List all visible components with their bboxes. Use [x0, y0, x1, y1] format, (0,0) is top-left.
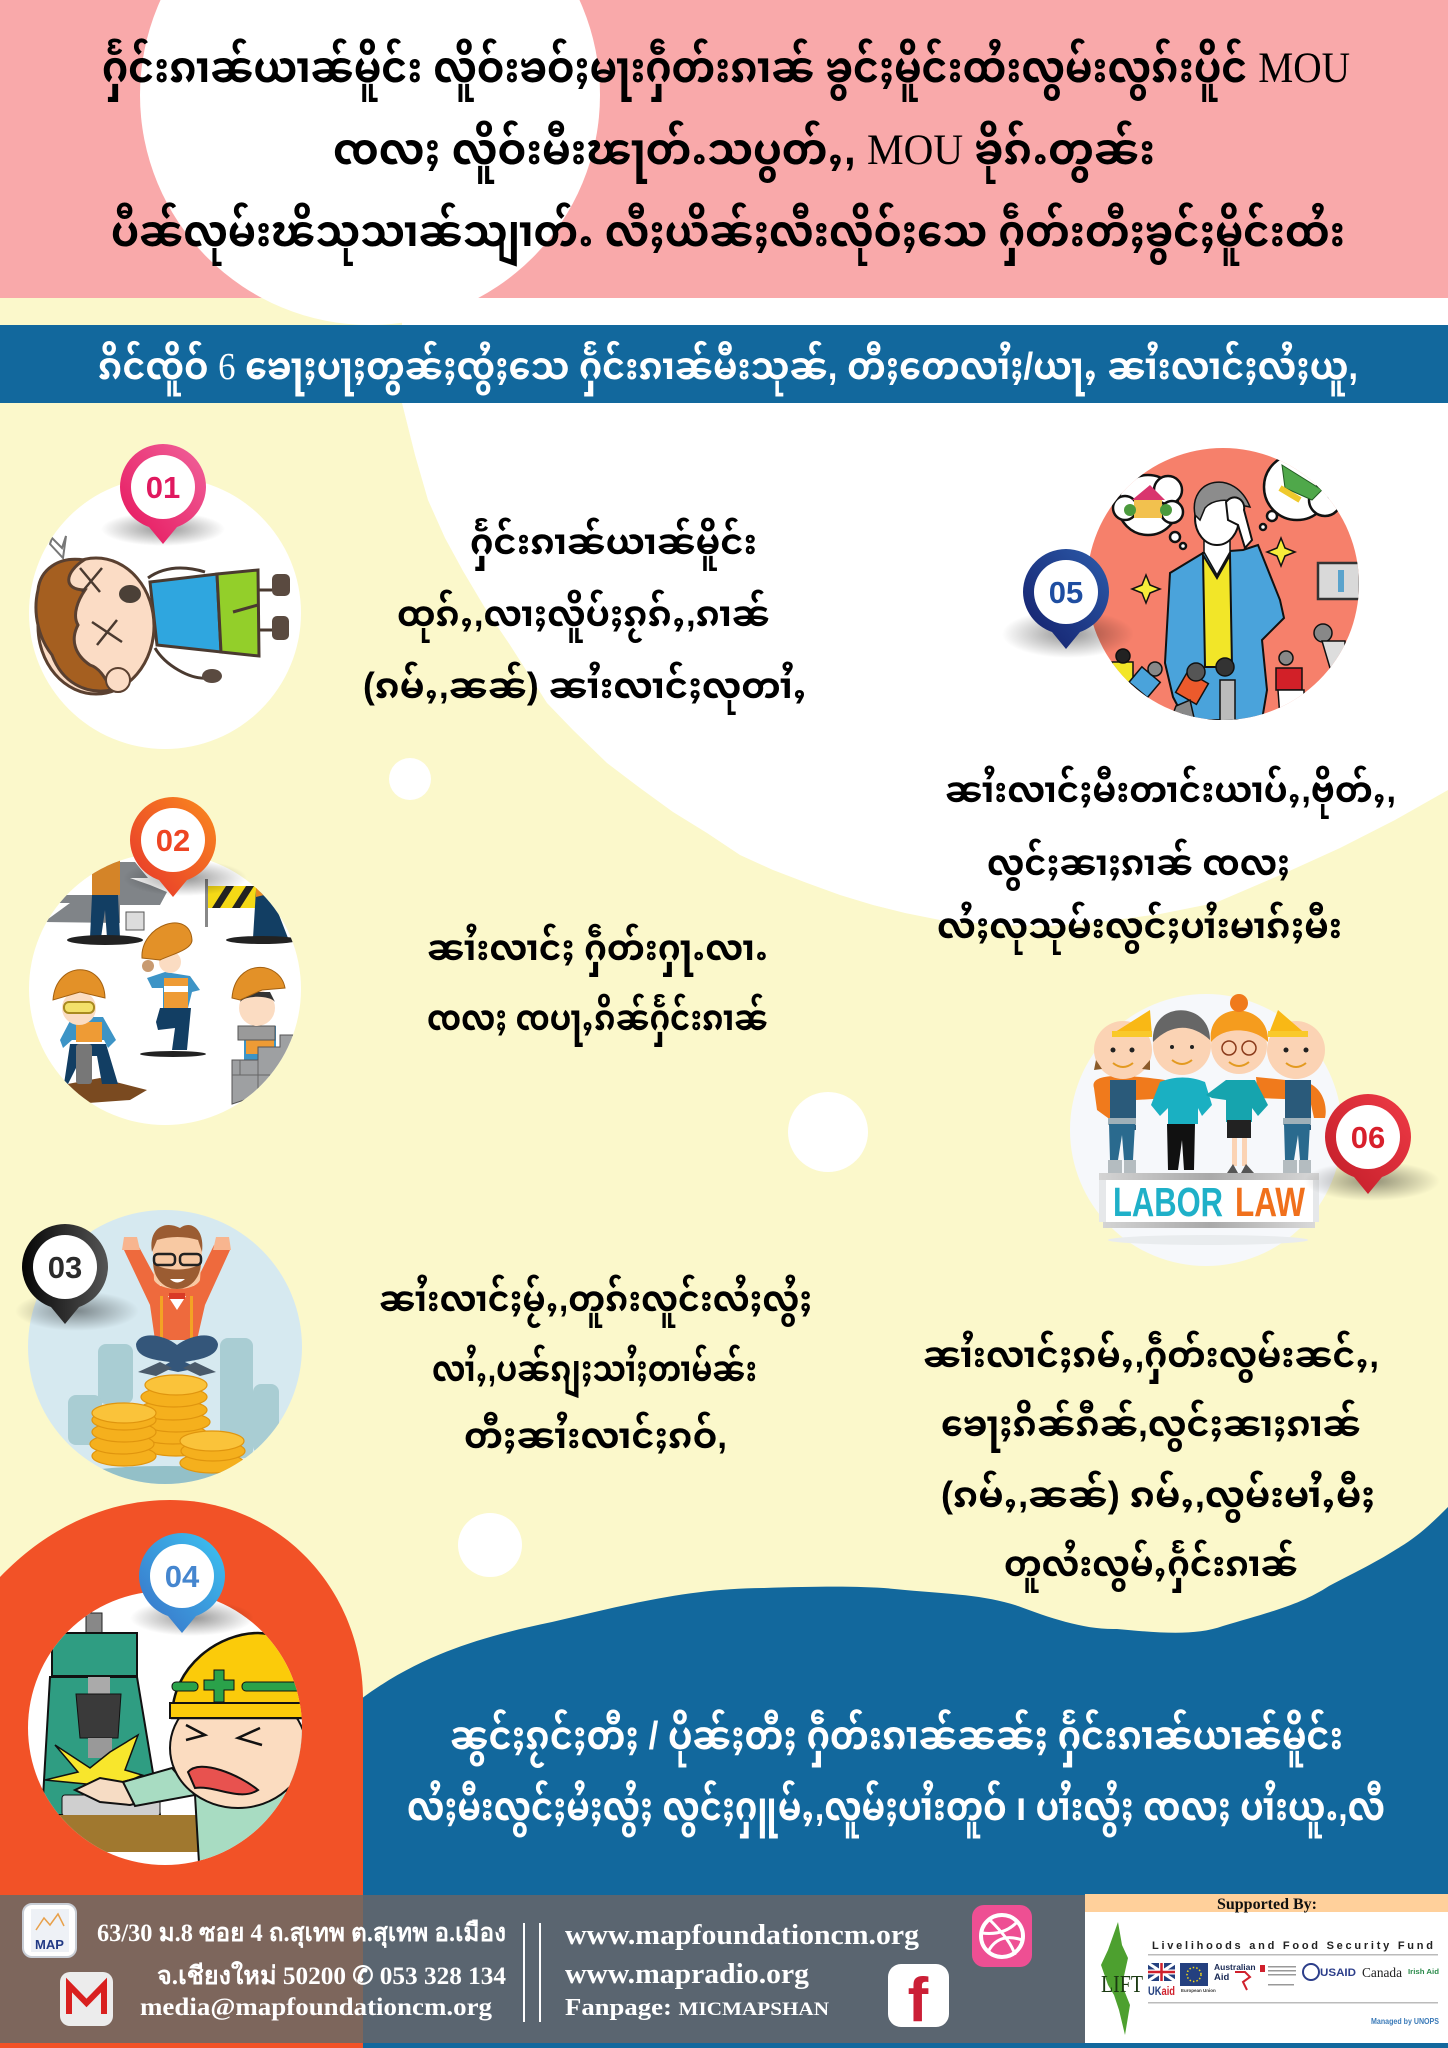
title: [102, 38, 1350, 267]
icon: MAP logo: [23, 1904, 76, 1957]
logo: UKaid: [1148, 1963, 1175, 1998]
background: blue wave: [361, 1507, 1448, 1900]
blue subtitle band: ၵိင်ၸိူဝ် 6 ၶေႃႈပႃႈတွၼ်ႈၸွႆႈသေ ႁႅင်းၵၢၼ်မီးသုၼ်, တီႈတေလၢႆႈ/ယႃႇ ၼၢႆးလၢင်ႈလႆႈယူ,: [98, 340, 1358, 397]
pin 02: 02: [156, 823, 190, 858]
text block 06: [923, 1330, 1379, 1593]
text block 03: တီႈၼၢႆးလၢင်ႈၵဝ်,: [464, 1411, 727, 1456]
worker centre: [140, 1051, 206, 1057]
text block 01: (ၵမ်ႇ,ၼၼ်) ၼၢႆးလၢင်ႈလုတၢႆႇ: [363, 661, 807, 715]
text block 01: ထုၵ်ႇ,လၢႈလိူပ်ႈၵႂၵ်ႇ,ၵၢၼ်: [397, 589, 770, 643]
worker right: [244, 1026, 276, 1060]
divider: [523, 1923, 541, 2022]
illustration 01: [36, 536, 290, 694]
closing statement: [407, 1709, 1385, 1838]
decorative dot: [458, 1513, 522, 1577]
panel 01: injured worker: [29, 477, 301, 749]
websites: [565, 1920, 919, 2021]
pin 06: [1304, 1094, 1440, 1201]
title: ၸလႈ လိူဝ်းမီးၽႃတ်ႉသပွတ်ႇ, MOU ၶိုၵ်ႉတွၼ်း: [333, 120, 1155, 184]
text block 06: ၶေႃႈၵိၼ်ၵီၼ်,လွင်ႈၼၢႈၵၢၼ်: [941, 1399, 1361, 1453]
text block 05: [937, 765, 1396, 955]
text block 06: ၼၢႆးလၢင်ႈၵမ်ႇ,ႁဵတ်းလွမ်းၼင်ႇ,: [923, 1330, 1379, 1384]
pin 04: 04: [165, 1559, 200, 1594]
pin 05: 05: [1049, 575, 1083, 610]
panel 05: press and stress: [1087, 448, 1360, 722]
pin 03: 03: [48, 1250, 82, 1285]
logo: LIFT: LIFT: [1101, 1972, 1143, 1998]
illustration 06: LABOR: [1113, 1179, 1223, 1225]
logo: Swiss: [1260, 1965, 1296, 1986]
websites: www.mapfoundationcm.org: [565, 1920, 919, 1951]
logo: UKaid: UKaid: [1148, 1984, 1175, 1998]
text block 02: ၼၢႆးလၢင်ႈ ႁဵတ်းႁႃႉလၢႉ: [427, 923, 768, 977]
text block 03: လၢႆႇ,ပၼ်ၵျႈသၢႆႈတၢမ်ၼ်း: [432, 1344, 757, 1399]
text block 05: လႆႈလုသုမ်းလွင်ႈပၢႆးမၢၵ်ႈမီး: [937, 901, 1342, 955]
icon: dribbble: [972, 1905, 1032, 1967]
decorative dot: [788, 1092, 868, 1172]
panel 02: unsafe work: [29, 853, 301, 1125]
logo: UNOPS: Managed by UNOPS: [1371, 2017, 1440, 2026]
logo: USAID: USAID: [1320, 1967, 1356, 1979]
text block 05: လွင်ႈၼၢႈၵၢၼ် ၸလႈ: [987, 838, 1290, 891]
icon: mail: [60, 1972, 113, 2026]
panel 04: machine accident: [28, 1592, 302, 1865]
text block 01: [363, 517, 807, 715]
pin 01: 01: [146, 470, 180, 505]
illustration 03: [68, 1225, 279, 1484]
websites: Fanpage: MICMAPSHAN: [565, 1995, 829, 2021]
logo: Australian Aid: Aid: [1214, 1972, 1230, 1983]
text block 05: ၼၢႆးလၢင်ႈမီးတၢင်းယၢပ်ႇ,ဗိုတ်ႇ,: [945, 765, 1396, 819]
text block 06: တူလႆးလွမ်ႇႁႅင်းၵၢၼ်: [1004, 1539, 1298, 1593]
blue subtitle band: [0, 325, 1448, 403]
background: orange arch: [0, 1500, 363, 1900]
panel 06: labor law: [1070, 994, 1342, 1266]
logo: Australian Aid: [1214, 1962, 1256, 1990]
title: ႁႅင်းၵၢၼ်ယၢၼ်မိူင်း လိူဝ်းၶဝ်ႈမႃးႁဵတ်းၵၢၼ် ၶွင်ႈမိူင်းထႆးလွမ်းလွၵ်းပိူင် MOU: [102, 38, 1350, 102]
pin 05: [1002, 549, 1134, 658]
illustration 02: [44, 855, 298, 1104]
logo: USAID: [1303, 1964, 1356, 1980]
websites: www.mapradio.org: [565, 1959, 809, 1990]
logo: LIFT: [1101, 1922, 1143, 2035]
logo: Irish Aid: Irish Aid: [1408, 1969, 1439, 1976]
contact address: [97, 1919, 506, 2021]
pin 02: [123, 797, 247, 897]
background: pink header: [0, 0, 1448, 298]
worker left: [62, 1078, 147, 1103]
decorative dot: [389, 758, 431, 800]
text block 03: ၼၢႆးလၢင်ႈမႂ်ႇ,တူၵ်းလူင်းလႆႈလွႆႈ: [379, 1274, 812, 1328]
logo: EU: European Union: [1181, 1988, 1216, 1993]
pin 06: 06: [1351, 1120, 1385, 1155]
text block 03: [379, 1274, 812, 1456]
icon: facebook: f: [908, 1966, 929, 2035]
pin 01: [101, 444, 225, 546]
background: cream page: [0, 298, 1448, 1898]
pin 03: [15, 1224, 139, 1331]
text block 06: (ၵမ်ႇ,ၼၼ်) ၵမ်ႇ,လွမ်းမၢႆႇမီႈ: [941, 1470, 1375, 1523]
illustration 04: [42, 1612, 302, 1861]
background: white header ellipse: [140, 0, 600, 325]
text block 01: ႁႅင်းၵၢၼ်ယၢၼ်မိူင်း: [470, 517, 757, 571]
illustration 06: [1094, 994, 1326, 1245]
footer bar: [0, 1890, 1448, 2048]
text block 02: [427, 923, 768, 1047]
heading: fund: Livelihoods and Food Security Fund: [1152, 1940, 1433, 1952]
panel: supporters: [1085, 1894, 1448, 2043]
icon: facebook: [888, 1964, 949, 2035]
logo: Australian Aid: Australian: [1214, 1962, 1256, 1972]
background: large white curve: [0, 298, 1448, 926]
illustration 06: LAW: [1235, 1179, 1305, 1225]
title: ပီၼ်လုမ်းၽိသုသၢၼ်သျၢတ်ႉ လီႈယိၼ်ႈလီးလိုဝ်ႈသေ ႁဵတ်းတီႈၶွင်ႈမိူင်းထႆး: [111, 202, 1345, 267]
contact address: media@mapfoundationcm.org: [140, 1994, 493, 2021]
closing statement: ၼွင်ႈၵႂင်ႈတီႈ / ပိုၼ်ႈတီႈ ႁဵတ်းၵၢၼ်ၼၼ်ႈ ႁႅင်းၵၢၼ်ယၢၼ်မိူင်း: [450, 1709, 1343, 1768]
heading: supported by: Supported By:: [1217, 1896, 1317, 1913]
panel 03: wages: [28, 1210, 302, 1498]
text block 02: ၸလႈ ၸပႃႇၵိၼ်ႁႅင်းၵၢၼ်: [427, 993, 768, 1047]
logo: Canada: Canada: [1362, 1966, 1403, 1981]
logo: EU: [1180, 1963, 1216, 1993]
pin 04: [130, 1533, 254, 1636]
contact address: จ.เชียงใหม่ 50200 ✆ 053 328 134: [157, 1960, 506, 1990]
illustration 05: [1112, 454, 1360, 722]
icon: MAP logo: MAP: [35, 1937, 64, 1952]
contact address: 63/30 ม.8 ซอย 4 ถ.สุเทพ ต.สุเทพ อ.เมือง: [97, 1919, 506, 1949]
